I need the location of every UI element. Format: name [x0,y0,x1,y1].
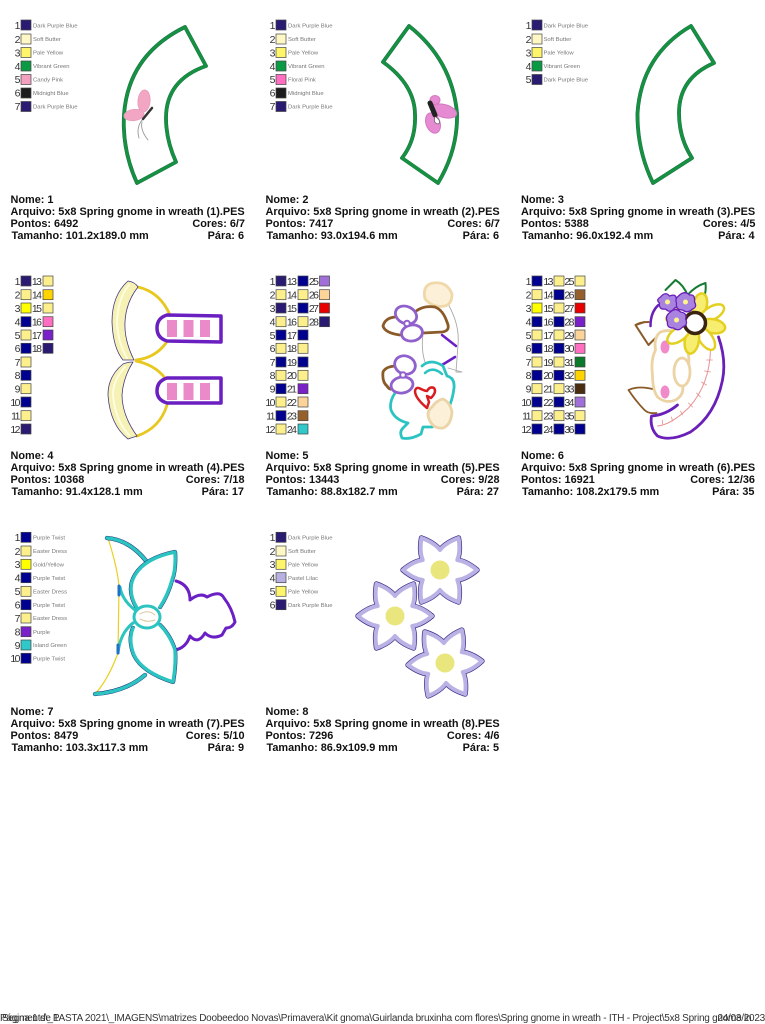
design 6 details: Nome: 6 [521,450,564,462]
legend: design 4 colours: 15 [32,303,42,315]
legend: design 7 colours: 5 [15,586,21,598]
legend: design 5 colours: 26 [309,290,319,302]
legend: design 5 colours: 1 [270,276,276,288]
legend: design 7 colours: Purple Twist [33,576,65,582]
legend: design 8 colours: Pastel Lilac [288,576,318,582]
legend: design 6 colours: 25 [564,276,575,288]
design 2 details: Arquivo: 5x8 Spring gnome in wreath (2).PES [266,206,500,218]
design 7 details [10,706,245,754]
legend: design 4 colours: 14 [32,290,42,302]
design 8 details: Cores: 4/6 [447,730,500,742]
design 6 details: Arquivo: 5x8 Spring gnome in wreath (6).PES [521,462,755,474]
legend: design 7 colours: 3 [15,559,21,571]
design 4 details: Pontos: 10368 [10,474,84,486]
legend: design 5 colours: 25 [309,276,319,288]
legend: design 6 colours: 3 [526,303,532,315]
legend: design 2 colours: Dark Purple Blue [288,104,333,110]
legend: design 6 colours: 9 [526,384,532,396]
design 1 details: Arquivo: 5x8 Spring gnome in wreath (1).PES [10,206,245,218]
legend: design 6 colours: 2 [526,290,532,302]
legend: design 4 colours: 8 [15,370,21,382]
legend: design 1 colours: Soft Butter [33,37,61,43]
legend: design 4 colours: 10 [10,397,21,409]
design 7 details: Cores: 5/10 [186,730,244,742]
legend: design 4 colours: 4 [15,316,21,328]
legend: design 5 colours: 7 [270,357,276,369]
panel: design 4 [10,276,245,498]
design 4 details: Tamanho: 91.4x128.1 mm [12,486,143,498]
legend: design 7 colours: 9 [15,640,21,652]
legend: design 1 colours: 1 [15,20,21,32]
legend: design 6 colours: 26 [564,290,575,302]
legend: design 4 colours: 5 [15,330,21,342]
legend: design 3 colours: 2 [526,34,532,46]
design 3 details: Pontos: 5388 [521,218,589,230]
legend: design 3 colours: Soft Butter [544,37,571,43]
legend: design 6 colours: 23 [543,410,554,422]
legend: design 5 colours: 13 [287,276,297,288]
legend: design 5 colours: 23 [287,410,297,422]
design 6 details: Pontos: 16921 [521,474,595,486]
legend: design 5 colours: 19 [287,357,297,369]
legend: design 6 colours: 22 [543,397,554,409]
legend: design 2 colours: Pale Yellow [288,50,319,56]
legend: design 7 colours: 2 [15,546,21,558]
footer: overlapping page number, file path and date: Segments\_PASTA 2021\_IMAGENS\matrizes Doobeedoo Novas\Primavera\Kit gnoma\Guirlanda bruxinha com flores\Spring gnome in wreath - ITH - Project\5x8 Spring gnome in [2,1013,751,1024]
legend: design 7 colours: Easter Dress [33,590,67,596]
legend: design 5 colours: 28 [309,316,319,328]
legend: design 4 colours: 1 [15,276,21,288]
legend: design 1 colours: 5 [15,74,21,86]
legend: design 6 colours: 13 [543,276,554,288]
design 2 details: Nome: 2 [266,194,308,206]
design 6 details: Cores: 12/36 [690,474,755,486]
panel: design 1 [10,20,245,242]
legend: design 6 colours: 35 [564,410,575,422]
legend: design 6 colours: 10 [521,397,532,409]
legend: design 2 colours: 2 [270,34,276,46]
design 3 details [521,194,756,242]
legend: design 1 colours: Dark Purple Blue [33,24,78,30]
panel: design 7 [10,532,245,754]
design 1 details: Pára: 6 [208,230,244,242]
legend: design 6 colours: 27 [564,303,575,315]
design 2 details: Pontos: 7417 [266,218,333,230]
icon: flower bottom right [406,629,484,697]
legend: design 6 colours: 36 [564,424,575,436]
design 6 artwork: gnome head with flower crown [628,280,727,438]
panel: design 3 [521,20,756,242]
legend: design 6 colours: 11 [522,410,532,422]
legend: design 5 colours: 15 [287,303,297,315]
legend: design 6 colours: 4 [526,316,532,328]
legend: design 8 colours: Soft Butter [288,549,316,555]
design 5 details: Pára: 27 [457,486,499,498]
design 8 details: Arquivo: 5x8 Spring gnome in wreath (8).PES [266,718,500,730]
legend: design 8 colours: Pale Yellow [288,590,319,596]
legend: design 2 colours: 6 [270,88,276,100]
legend: design 5 colours [265,276,330,436]
legend: design 1 colours: Midnight Blue [33,91,69,97]
legend: design 2 colours: 4 [270,61,276,73]
legend: design 2 colours: Floral Pink [288,78,316,84]
legend: design 2 colours: Dark Purple Blue [288,24,333,30]
design 5 details: Nome: 5 [266,450,308,462]
legend: design 3 colours [526,20,589,86]
legend: design 1 colours: 7 [15,101,21,113]
legend: design 6 colours: 19 [543,357,554,369]
legend: design 7 colours: Easter Dress [33,616,67,622]
legend: design 6 colours [521,276,585,436]
legend: design 6 colours: 33 [564,384,575,396]
legend: design 5 colours: 21 [287,384,297,396]
legend: design 7 colours: 7 [15,613,21,625]
design 6 details [521,450,755,498]
design 4 details [10,450,245,498]
legend: design 6 colours: 14 [543,290,554,302]
design 3 details: Cores: 4/5 [703,218,756,230]
design 5 details: Cores: 9/28 [441,474,500,486]
legend: design 1 colours [15,20,78,113]
legend: design 7 colours: 8 [15,626,21,638]
legend: design 7 colours: Gold/Yellow [33,562,65,568]
legend: design 7 colours [10,532,67,665]
design 7 details: Arquivo: 5x8 Spring gnome in wreath (7).PES [10,718,245,730]
legend: design 3 colours: 5 [526,74,532,86]
legend: design 6 colours: 20 [543,370,554,382]
footer: overlapping page number, file path and date: 24/03/2023 [717,1013,765,1024]
design 2 artwork: arch with butterfly [383,26,458,183]
legend: design 5 colours: 9 [270,384,276,396]
legend: design 5 colours: 14 [287,290,297,302]
legend: design 6 colours: 8 [526,370,532,382]
legend: design 4 colours: 3 [15,303,21,315]
legend: design 7 colours: Purple [33,630,51,636]
legend: design 7 colours: Easter Dress [33,549,67,555]
legend: design 4 colours: 11 [11,410,21,422]
legend: design 5 colours: 17 [287,330,297,342]
legend: design 5 colours: 20 [287,370,297,382]
legend: design 4 colours: 13 [32,276,42,288]
design 8 details: Pára: 5 [463,742,499,754]
legend: design 6 colours: 30 [564,343,575,355]
design 5 details: Pontos: 13443 [266,474,339,486]
design 1 details: Nome: 1 [10,194,53,206]
legend: design 8 colours: Pale Yellow [288,562,319,568]
design 7 details: Nome: 7 [10,706,53,718]
legend: design 6 colours: 7 [526,357,532,369]
legend: design 1 colours: 3 [15,48,21,60]
legend: design 2 colours: Vibrant Green [288,64,325,70]
legend: design 7 colours: 6 [15,600,21,612]
legend: design 2 colours: Soft Butter [288,37,316,43]
legend: design 8 colours: 3 [270,559,276,571]
legend: design 5 colours: 12 [265,424,276,436]
design 7 details: Tamanho: 103.3x117.3 mm [12,742,148,754]
design 6 details: Tamanho: 108.2x179.5 mm [522,486,660,498]
legend: design 6 colours: 6 [526,343,532,355]
design 4 details: Nome: 4 [10,450,53,462]
design 3 artwork: plain arch [637,26,714,183]
legend: design 7 colours: Purple Twist [33,536,65,542]
legend: design 6 colours: 28 [564,316,575,328]
legend: design 1 colours: Dark Purple Blue [33,104,78,110]
design 7 artwork: moon, bow and cloud [95,538,235,694]
legend: design 3 colours: 1 [526,20,532,32]
legend: design 4 colours [10,276,53,436]
legend: design 4 colours: 18 [32,343,42,355]
legend: design 8 colours: 1 [270,532,276,544]
legend: design 2 colours [270,20,333,113]
legend: design 5 colours: 5 [270,330,276,342]
design 7 details: Pára: 9 [208,742,244,754]
legend: design 8 colours: 5 [270,586,276,598]
design 2 details: Pára: 6 [463,230,499,242]
legend: design 4 colours: 12 [10,424,21,436]
legend: design 3 colours: Vibrant Green [544,64,580,70]
legend: design 8 colours [270,532,333,612]
legend: design 6 colours: 15 [543,303,554,315]
legend: design 4 colours: 9 [15,384,21,396]
panel: design 5 [265,276,500,498]
legend: design 1 colours: 4 [15,61,21,73]
design 1 details: Cores: 6/7 [192,218,245,230]
legend: design 6 colours: 17 [543,330,554,342]
legend: design 6 colours: 21 [543,384,554,396]
legend: design 2 colours: Midnight Blue [288,91,324,97]
legend: design 5 colours: 18 [287,343,297,355]
legend: design 1 colours: 6 [15,88,21,100]
legend: design 8 colours: Dark Purple Blue [288,603,333,609]
legend: design 6 colours: 1 [526,276,532,288]
legend: design 8 colours: Dark Purple Blue [288,536,333,542]
design 5 details: Tamanho: 88.8x182.7 mm [266,486,398,498]
design 8 details: Pontos: 7296 [266,730,333,742]
legend: design 5 colours: 10 [265,397,276,409]
design 4 details: Cores: 7/18 [186,474,244,486]
design 8 details: Nome: 8 [266,706,308,718]
legend: design 3 colours: 4 [526,61,532,73]
legend: design 1 colours: Vibrant Green [33,64,70,70]
legend: design 5 colours: 27 [309,303,319,315]
design 8 details [266,706,500,754]
legend: design 5 colours: 3 [270,303,276,315]
legend: design 5 colours: 2 [270,290,276,302]
icon: flower left [358,584,432,648]
legend: design 4 colours: 17 [32,330,42,342]
footer: overlapping page number, file path and date: Página 1 de 1 [0,1013,59,1024]
legend: design 4 colours: 7 [15,357,21,369]
legend: design 2 colours: 5 [270,74,276,86]
design 3 details: Nome: 3 [521,194,564,206]
legend: design 6 colours: 29 [564,330,575,342]
legend: design 7 colours: 4 [15,572,21,584]
legend: design 5 colours: 11 [266,410,276,422]
legend: design 5 colours: 4 [270,316,276,328]
legend: design 5 colours: 24 [287,424,297,436]
legend: design 1 colours: Candy Pink [33,78,63,84]
legend: design 1 colours: Pale Yellow [33,50,64,56]
design 2 details: Tamanho: 93.0x194.6 mm [266,230,398,242]
legend: design 6 colours: 12 [521,424,532,436]
design 6 details: Pára: 35 [712,486,754,498]
design 5 details: Arquivo: 5x8 Spring gnome in wreath (5).PES [266,462,500,474]
design 1 details [10,194,245,242]
design 2 details [266,194,500,242]
design 4 details: Arquivo: 5x8 Spring gnome in wreath (4).PES [10,462,245,474]
panel: design 6 [521,276,755,498]
design 4 details: Pára: 17 [202,486,244,498]
legend: design 8 colours: 6 [270,600,276,612]
legend: design 6 colours: 16 [543,316,554,328]
legend: design 6 colours: 32 [564,370,575,382]
panel: design 2 [266,20,500,242]
legend: design 6 colours: 24 [543,424,554,436]
design 7 details: Pontos: 8479 [10,730,78,742]
legend: design 6 colours: 34 [564,397,575,409]
legend: design 7 colours: 10 [10,653,21,665]
legend: design 4 colours: 6 [15,343,21,355]
legend: design 3 colours: Pale Yellow [544,50,574,56]
design 5 artwork: gnome parts with bows, heart and boot [383,283,462,438]
legend: design 2 colours: 3 [270,48,276,60]
design 8 details: Tamanho: 86.9x109.9 mm [266,742,398,754]
legend: design 7 colours: 1 [15,532,21,544]
legend: design 3 colours: 3 [526,48,532,60]
legend: design 1 colours: 2 [15,34,21,46]
legend: design 4 colours: 16 [32,316,42,328]
legend: design 7 colours: Purple Twist [33,603,65,609]
legend: design 6 colours: 18 [543,343,554,355]
legend: design 5 colours: 22 [287,397,297,409]
legend: design 4 colours: 2 [15,290,21,302]
design 4 artwork: two domes with striped tabs [108,281,221,439]
legend: design 5 colours: 16 [287,316,297,328]
legend: design 7 colours: Island Green [33,643,67,649]
design 2 details: Cores: 6/7 [447,218,500,230]
panel: design 8 [266,532,500,754]
legend: design 8 colours: 4 [270,572,276,584]
design 3 details: Arquivo: 5x8 Spring gnome in wreath (3).PES [521,206,755,218]
icon: flower top right [403,538,477,602]
design 1 details: Tamanho: 101.2x189.0 mm [12,230,149,242]
legend: design 8 colours: 2 [270,546,276,558]
design 3 details: Tamanho: 96.0x192.4 mm [522,230,653,242]
design 1 details: Pontos: 6492 [10,218,78,230]
legend: design 2 colours: 7 [270,101,276,113]
legend: design 6 colours: 31 [564,357,575,369]
design 1 artwork: arch with butterfly [123,27,206,183]
legend: design 5 colours: 8 [270,370,276,382]
legend: design 7 colours: Purple Twist [33,656,65,662]
legend: design 3 colours: Dark Purple Blue [544,78,589,84]
legend: design 2 colours: 1 [270,20,276,32]
legend: design 3 colours: Dark Purple Blue [544,24,589,30]
design 5 details [266,450,500,498]
legend: design 5 colours: 6 [270,343,276,355]
design 8 artwork: three six-petal flowers [358,538,484,697]
design 3 details: Pára: 4 [718,230,754,242]
legend: design 6 colours: 5 [526,330,532,342]
